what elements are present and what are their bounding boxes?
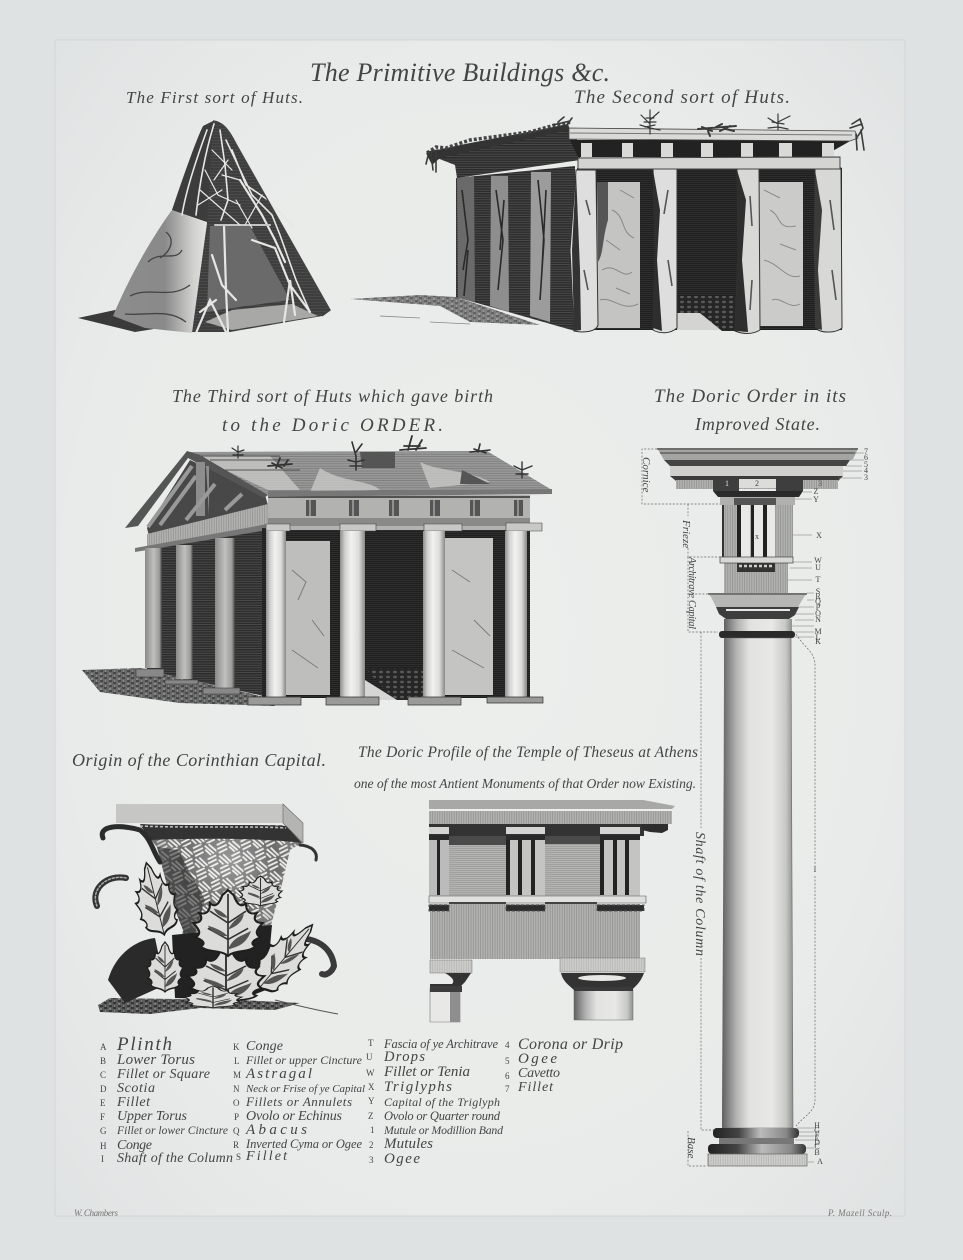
front capitals [266, 523, 542, 531]
legend: column 3: Mutule or Modillion Band [383, 1123, 503, 1137]
heading: doric profile theseus [354, 744, 698, 791]
stone panels [285, 541, 330, 695]
legend: column 2: S [236, 1152, 241, 1162]
letter labels: P [816, 603, 821, 612]
legend: column 2: Fillet or upper Cincture [245, 1053, 363, 1067]
letter labels: F [815, 1130, 820, 1139]
vertical labels: Architrave Capital [686, 556, 697, 629]
vertical labels [640, 457, 707, 1158]
illustration: second hut [350, 110, 864, 334]
ground [350, 295, 540, 325]
legend: column 3: 2 [369, 1140, 374, 1150]
legend: column 1: A [100, 1042, 107, 1052]
illustration: third hut [82, 436, 552, 706]
legend: column 3: Y [368, 1096, 375, 1106]
legend: column 3: Mutules [383, 1136, 433, 1152]
inline markers: 3 [818, 479, 822, 488]
legend: column 4: 6 [505, 1071, 510, 1081]
legend: column 2: Ovolo or Echinus [246, 1109, 343, 1124]
legend: column 3: Ogee [384, 1151, 420, 1167]
legend: column 4: 5 [505, 1056, 510, 1066]
legend: column 1: Fillet or Square [116, 1067, 210, 1082]
legend: column 2: R [233, 1140, 239, 1150]
front posts [570, 168, 842, 334]
letter labels: T [816, 575, 821, 584]
letter labels: M [814, 627, 822, 636]
legend: column 2: Neck or Frise of ye Capital [245, 1083, 365, 1095]
letter labels: I [814, 865, 817, 874]
doorway [677, 170, 735, 296]
legend: column 1: D [100, 1084, 107, 1094]
gable soffit [147, 460, 268, 540]
letter labels: N [815, 615, 821, 624]
signature: draughtsman: W. Chambers [74, 1208, 118, 1218]
heading: third sort of huts [172, 386, 493, 436]
legend: column 1: B [100, 1056, 106, 1066]
vertical labels: Shaft of the Column [692, 832, 707, 956]
legend: column 3: Ovolo or Quarter round [384, 1109, 501, 1123]
letter labels: G [814, 1126, 820, 1135]
skin covering [113, 210, 207, 333]
branches [182, 124, 310, 333]
legend: column 1: Fillet [116, 1095, 151, 1110]
legend: column 1: H [100, 1141, 107, 1151]
lintel [578, 157, 840, 169]
heading: second sort of huts: The Second sort of Huts. [574, 87, 790, 108]
inline markers: 1 [725, 479, 729, 488]
legend: column 3: 1 [370, 1125, 374, 1135]
front column bases [248, 697, 543, 705]
joists [570, 140, 852, 157]
legend: column 1: Fillet or lower Cincture [116, 1125, 228, 1137]
letter labels: 7 [864, 447, 868, 456]
capital [708, 593, 807, 638]
legend: column 3: Capital of the Triglyph [384, 1095, 500, 1109]
roof slope and moss [437, 130, 580, 178]
stone panel left [597, 182, 640, 328]
cornice top surface [429, 800, 675, 809]
diagram: doric order column [640, 447, 868, 1166]
stone panel right [759, 182, 803, 326]
triglyphs [429, 827, 640, 896]
legend: column 2: Conge [246, 1039, 283, 1054]
letter labels: Y [813, 495, 819, 504]
ground shadow [78, 310, 160, 332]
title: The Primitive Buildings &c. [310, 58, 610, 87]
base [708, 1128, 807, 1166]
letter labels: 4 [864, 466, 868, 475]
legend: column 3: 3 [369, 1155, 374, 1165]
legend: column 2: O [233, 1098, 240, 1108]
letter labels: A [817, 1157, 823, 1166]
dark shadow behind leaves [172, 925, 272, 1000]
legend: column 1: Shaft of the Column [117, 1151, 233, 1166]
architrave [430, 904, 640, 959]
letter labels: D [814, 1138, 820, 1147]
mutule band [429, 824, 644, 836]
legend: column 2: P [234, 1112, 239, 1122]
heading: doric profile theseus: The Doric Profile of the Temple of Theseus at Athens [358, 744, 698, 761]
letter labels: U [815, 563, 821, 572]
legend: column 2: K [233, 1042, 240, 1052]
roof beams [569, 128, 858, 141]
doorway floor [365, 668, 423, 700]
side column bases [136, 669, 240, 694]
legend: column 3: X [368, 1082, 375, 1092]
drops [429, 905, 644, 911]
vertical labels: Frieze [680, 519, 692, 548]
capital right [560, 958, 645, 1020]
letter labels: X [816, 531, 822, 540]
letter labels: S [816, 587, 820, 596]
legend: column 1: Conge [117, 1138, 152, 1153]
front wall backing [262, 528, 530, 698]
inline markers: 2 [755, 479, 759, 488]
legend: column 3: U [366, 1052, 373, 1062]
legend: column 3: Drops [383, 1049, 425, 1065]
inline markers [725, 479, 822, 541]
letter labels: 6 [864, 453, 868, 462]
letter labels [813, 447, 868, 1166]
legend: column 2: Astragal [245, 1066, 312, 1082]
shaft [722, 638, 793, 1128]
legend: column 2: Inverted Cyma or Ogee [245, 1137, 362, 1151]
ground [82, 668, 275, 706]
letter labels: Q [815, 597, 821, 606]
mutule band [676, 479, 838, 505]
legend: column 2: M [233, 1070, 241, 1080]
legend: column 4: Corona or Drip [518, 1036, 623, 1053]
legend: column 2: Q [233, 1126, 240, 1136]
illustration: corinthian capital origin [95, 804, 338, 1014]
legend: column 4: Fillet [517, 1080, 554, 1095]
legend: column 3: Fillet or Tenia [383, 1064, 470, 1080]
corona [429, 811, 672, 824]
legend: column 3: Triglyphs [384, 1079, 452, 1095]
inline markers: x [755, 532, 759, 541]
side wall posts [457, 176, 475, 302]
side wall [456, 166, 575, 331]
legend: column 1: Plinth [116, 1034, 172, 1055]
heading: origin of corinthian capital: Origin of the Corinthian Capital. [72, 750, 326, 770]
legend: column 2 [233, 1039, 365, 1164]
signature: engraver: P. Mazell Sculp. [827, 1208, 892, 1218]
letter labels: B [814, 1148, 820, 1157]
vertical labels: Base [685, 1137, 697, 1158]
letter labels: Z [814, 487, 819, 496]
letter labels: W [814, 556, 822, 565]
side frieze [147, 504, 268, 548]
legend: column 3: W [366, 1068, 375, 1078]
legend: column 2: Abacus [245, 1122, 307, 1138]
legend: column 1: Lower Torus [116, 1052, 195, 1068]
letter labels: K [815, 637, 821, 646]
legend: column 2: Fillets or Annulets [245, 1094, 352, 1109]
side columns [145, 548, 162, 668]
heading: third sort of huts: to the Doric ORDER. [222, 415, 443, 436]
hut interior and lattice [172, 121, 330, 332]
front columns [266, 531, 286, 698]
legend: column 1: Upper Torus [117, 1109, 188, 1124]
volutes [95, 827, 334, 975]
legend: column 4 [505, 1036, 623, 1095]
moss tufts [232, 436, 532, 478]
architrave [724, 563, 788, 593]
illustration: first hut [78, 121, 330, 333]
frieze with triglyph [722, 505, 793, 557]
leader lines [788, 453, 864, 1162]
letter labels: 3 [864, 473, 868, 482]
legend: column 1: E [100, 1098, 106, 1108]
letter labels: E [815, 1134, 820, 1143]
cornice [657, 448, 858, 481]
roof surface [187, 451, 552, 495]
abacus tile [116, 804, 283, 823]
heading: doric order improved: Improved State. [694, 414, 820, 434]
legend: column 4: Cavetto [518, 1066, 560, 1081]
legend: column 3: T [368, 1038, 374, 1048]
letter labels: O [815, 609, 821, 618]
legend: column 1: C [100, 1070, 106, 1080]
letter labels: 5 [864, 460, 868, 469]
leaves [108, 938, 165, 1003]
heading: doric order improved [654, 386, 846, 434]
vertical labels: Cornice [640, 457, 652, 493]
legend: column 1 [100, 1034, 233, 1166]
heading: doric order improved: The Doric Order in its [654, 386, 846, 407]
legend: column 4: 7 [505, 1084, 510, 1094]
legend: column 1: G [100, 1126, 107, 1136]
legend: column 1: F [100, 1112, 105, 1122]
letter labels: R [815, 592, 821, 601]
moss tufts [426, 110, 864, 172]
heading: doric profile theseus: one of the most Antient Monuments of that Order now Existing. [354, 776, 696, 791]
side wall [147, 522, 268, 697]
heading: third sort of huts: The Third sort of Huts which gave birth [172, 386, 493, 406]
legend: column 3: Fascia of ye Architrave [383, 1037, 498, 1051]
legend: column 2: L [234, 1056, 240, 1066]
front wall: dark backing [577, 168, 842, 330]
legend: column 4: Ogee [518, 1051, 557, 1067]
legend: column 1: Scotia [117, 1081, 155, 1096]
letter labels: L [816, 633, 821, 642]
legend: column 2: N [233, 1084, 240, 1094]
dotted dimension lines [642, 449, 815, 1166]
legend: column 1: I [101, 1154, 104, 1164]
illustration: doric profile of temple of theseus [429, 800, 675, 1022]
legend: column 2: Fillet [245, 1149, 288, 1164]
capital left [430, 960, 472, 1022]
taenia and drops [720, 557, 793, 572]
legend: column 3: Z [368, 1111, 374, 1121]
letter labels: H [814, 1121, 820, 1130]
metopes [449, 836, 506, 896]
heading: first sort of huts: The First sort of Huts. [126, 88, 303, 107]
legend: column 3 [366, 1037, 503, 1167]
eave [268, 489, 552, 497]
ground [98, 998, 300, 1014]
taenia [429, 896, 646, 903]
basket [140, 825, 302, 990]
letter labels: C [814, 1142, 820, 1151]
entablature [268, 495, 530, 530]
legend: column 4: 4 [505, 1040, 510, 1050]
